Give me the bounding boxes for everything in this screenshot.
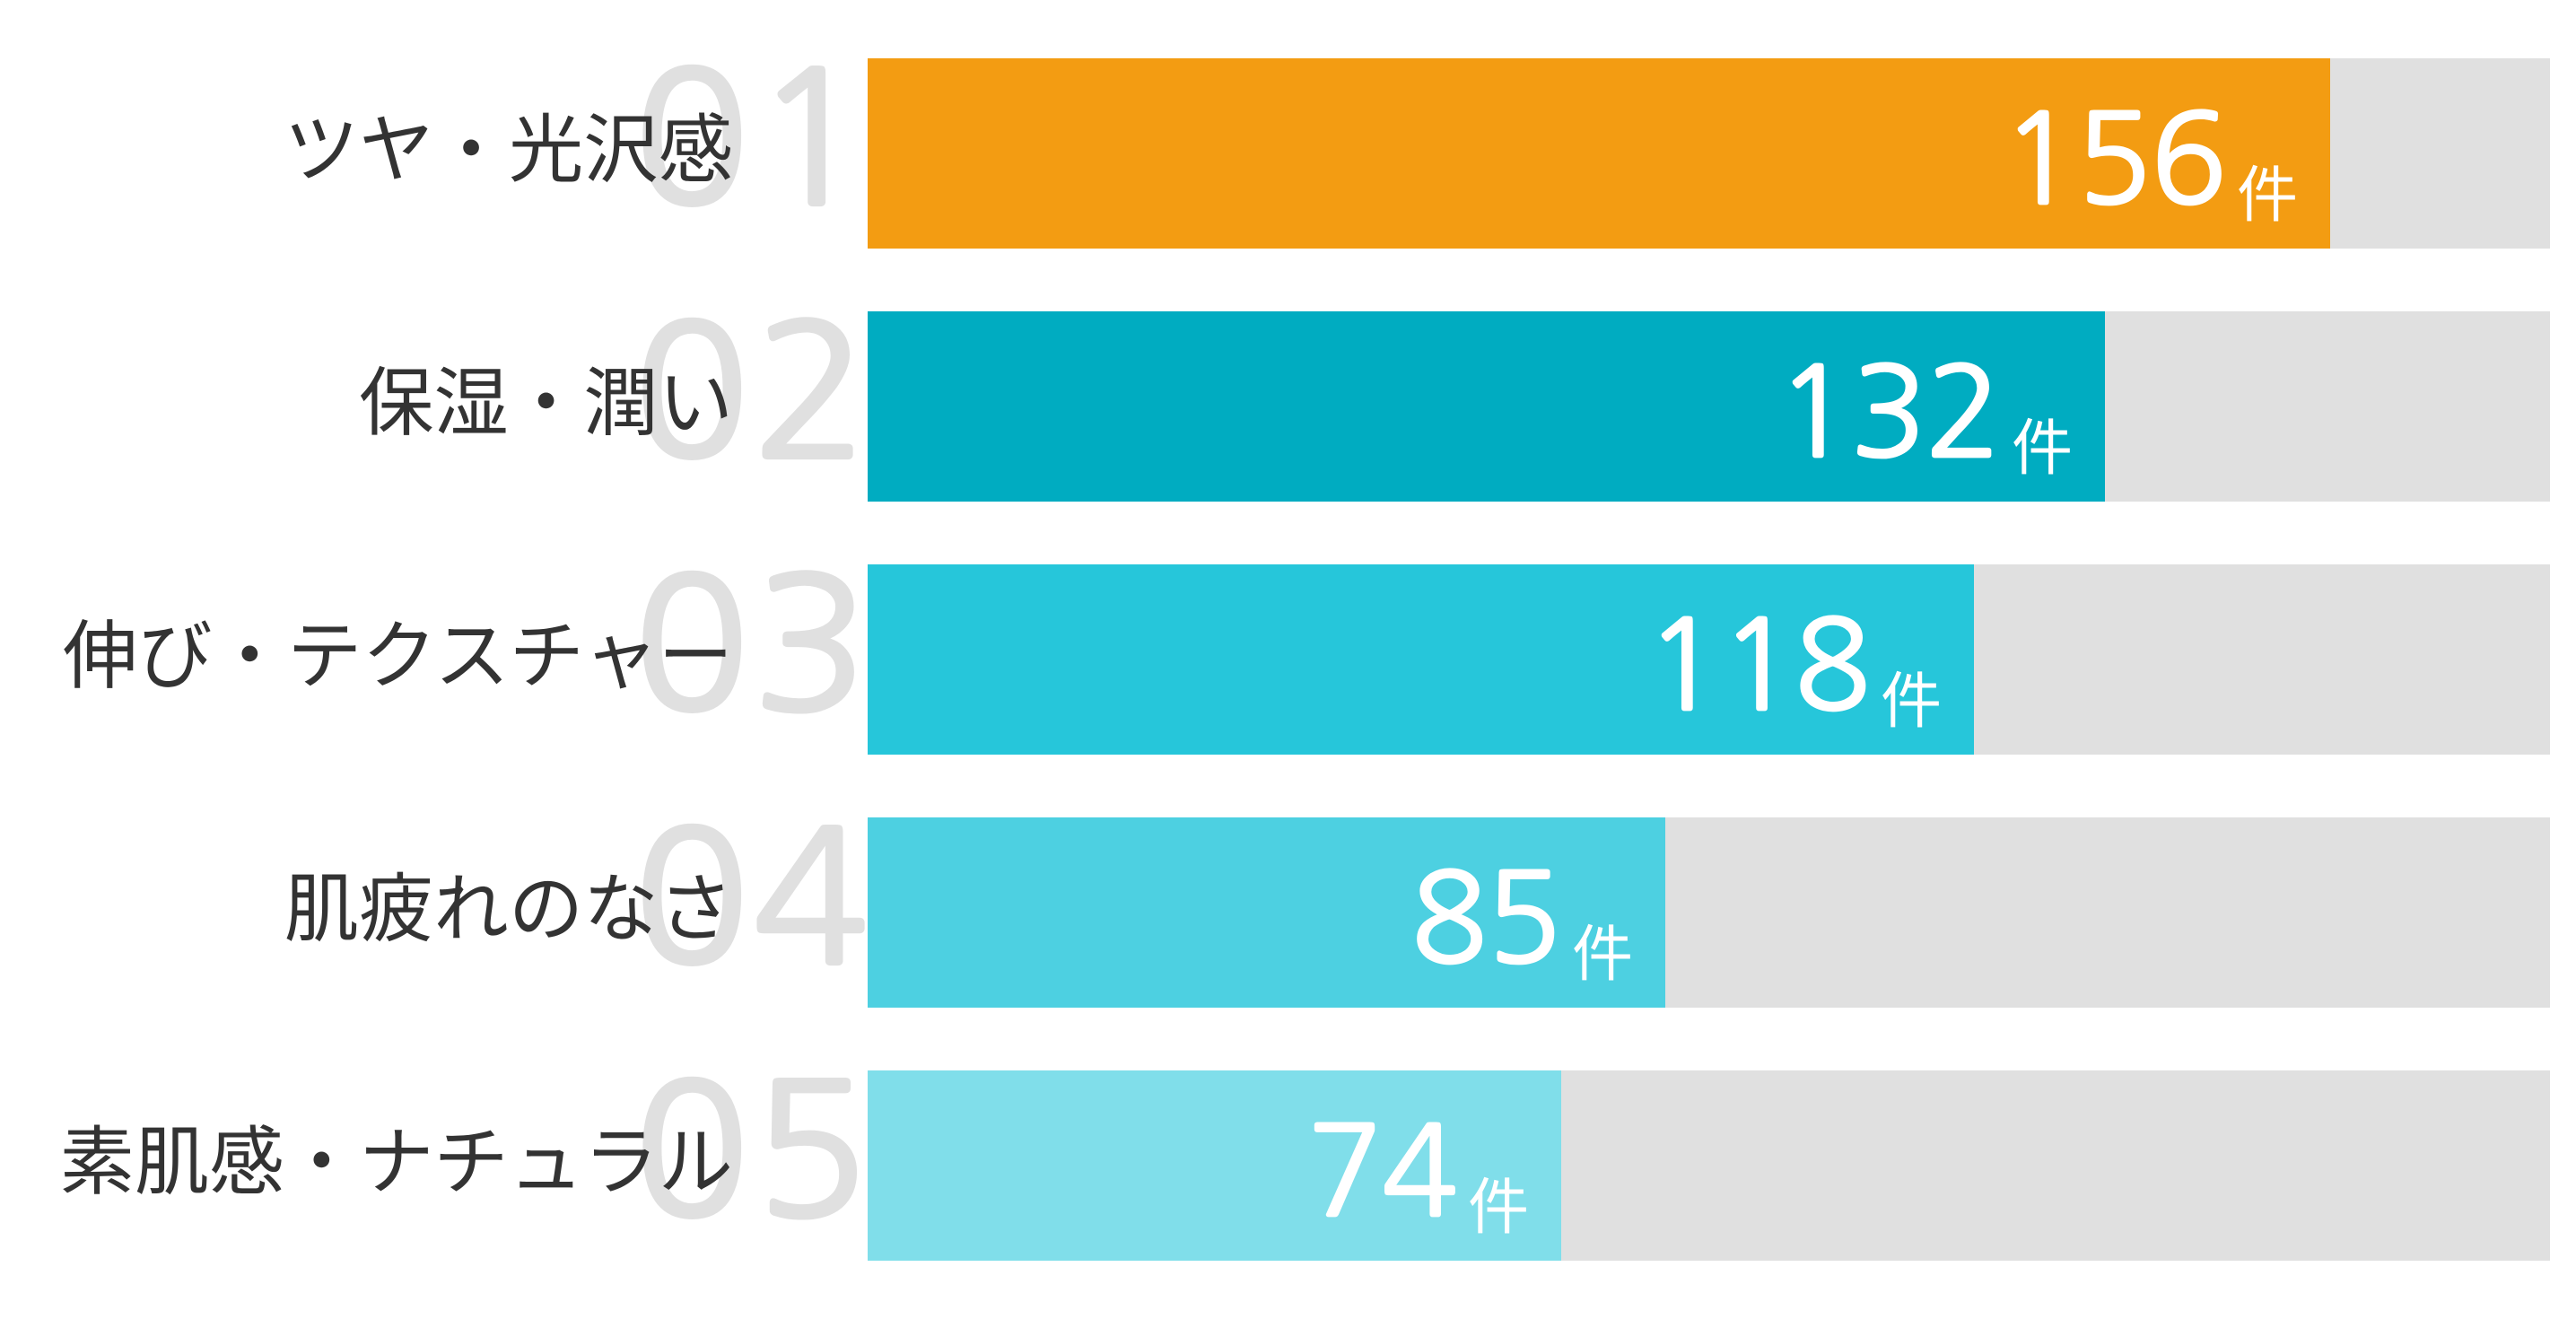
- unit: 件: [1572, 921, 1633, 989]
- value 74: 74: [1306, 1111, 1456, 1234]
- label: 素肌感・ナチュラル: [59, 1121, 733, 1204]
- unit: 件: [2012, 415, 2073, 483]
- value bar: [868, 58, 2330, 249]
- value bar: [868, 564, 1974, 755]
- rank number 03: 03: [633, 554, 872, 737]
- rank number 05: 05: [633, 1060, 872, 1243]
- label: 保湿・潤い: [359, 362, 733, 445]
- track: [868, 58, 2550, 249]
- rank number 02: 02: [633, 301, 872, 484]
- track: [868, 564, 2550, 755]
- row 4: 肌疲れのなさ: [284, 807, 2550, 1008]
- unit: 件: [1468, 1174, 1529, 1242]
- row 2: 保湿・潤い: [359, 301, 2550, 502]
- value bar: [868, 1070, 1561, 1261]
- rank number 04: 04: [633, 807, 872, 990]
- track: [868, 1070, 2550, 1261]
- value 132: 132: [1776, 352, 2000, 475]
- value 118: 118: [1645, 605, 1869, 728]
- rank number 01: 01: [633, 48, 872, 231]
- row 5: 素肌感・ナチュラル: [59, 1060, 2550, 1261]
- label: ツヤ・光沢感: [284, 109, 733, 192]
- value 85: 85: [1410, 858, 1560, 981]
- unit: 件: [2237, 162, 2298, 230]
- row 1: ツヤ・光沢感: [284, 48, 2550, 249]
- track: [868, 311, 2550, 502]
- track: [868, 817, 2550, 1008]
- value 156: 156: [2001, 99, 2225, 222]
- row 3: 伸び・テクスチャー: [63, 554, 2550, 755]
- value bar: [868, 817, 1665, 1008]
- value bar: [868, 311, 2105, 502]
- label: 肌疲れのなさ: [284, 868, 733, 951]
- unit: 件: [1881, 668, 1942, 736]
- label: 伸び・テクスチャー: [63, 615, 733, 698]
